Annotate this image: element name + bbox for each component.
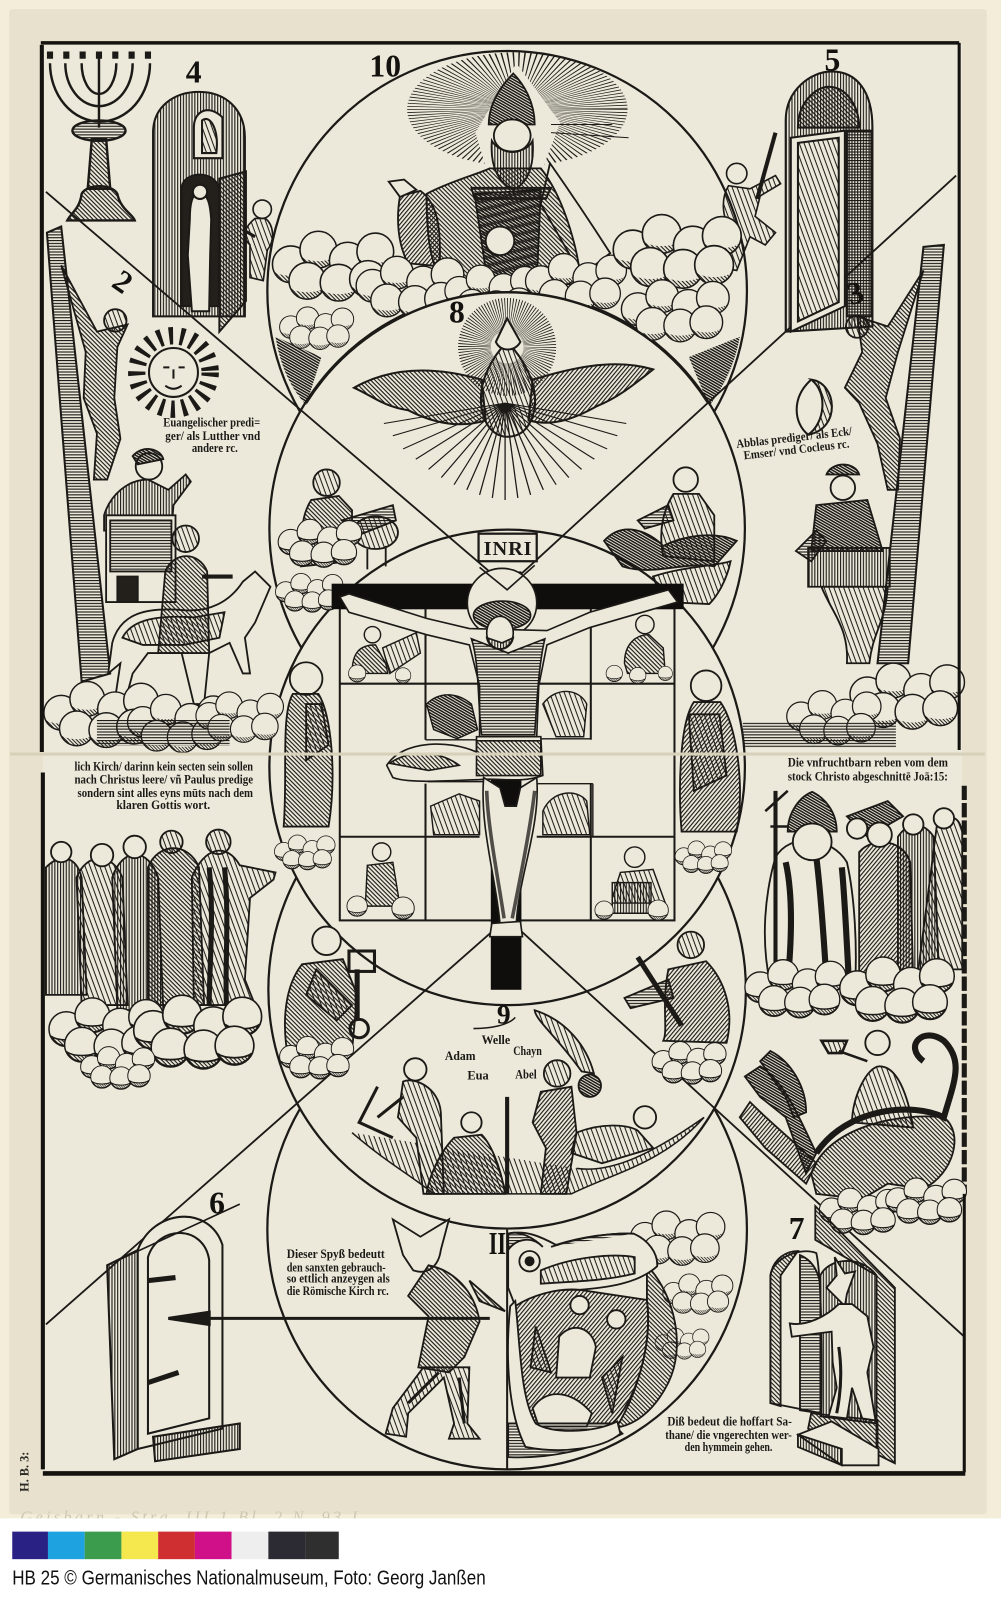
text: hell caption: den hymmein gehen. (685, 1440, 772, 1454)
stamp: H. B. 3: (18, 1452, 32, 1492)
right border segment (962, 786, 967, 1194)
panel: circle 11 devil and hell mouth (107, 1185, 895, 1469)
rays lower (384, 403, 626, 500)
text: left crowd caption: nach Christus leere/ vñ Paulus predige (74, 773, 254, 787)
icon: Mary (274, 662, 335, 870)
icon: horseman (108, 526, 270, 704)
icon: Moses (595, 847, 668, 920)
icon: God the Father (389, 73, 610, 290)
text: spear caption: die Römische Kirch rc. (287, 1284, 389, 1298)
text: hell caption (665, 1414, 792, 1454)
panel: right crowd (745, 791, 962, 1023)
icon: sun (137, 336, 210, 409)
panel: left crowd (46, 830, 276, 1089)
number 11: II (489, 1226, 506, 1261)
icon: Eve (427, 1112, 505, 1194)
text: spear caption: so ettlich anzeygen als (287, 1272, 390, 1286)
icon: arched door (786, 71, 872, 332)
text: left crowd caption: sondern sint alles eyns mūts nach dem (78, 786, 253, 800)
icon: angel left (243, 200, 273, 281)
icon: arch doorway with figure (153, 92, 246, 332)
icon: John (675, 670, 740, 873)
text: Evangelical preacher caption: Euangelischer predi= (163, 416, 260, 430)
icon: evangelist top left (349, 627, 420, 683)
text: spear caption: den sanxten gebrauch- (287, 1260, 386, 1274)
icon: INRI titulus (479, 534, 537, 561)
icon: ox (431, 794, 480, 835)
text: spear caption (287, 1247, 390, 1298)
text: indulgence preacher caption: Abblas prediger/ als Eck/ (735, 424, 853, 451)
text: left crowd caption (74, 759, 254, 812)
icon: devil with spear (386, 1219, 505, 1439)
text: left crowd caption: klaren Gottis wort. (116, 798, 210, 812)
labels: Abel (515, 1068, 537, 1082)
icon: Christ crucified (340, 565, 678, 937)
icon: door left (107, 1204, 240, 1461)
panel: circle 8 dove (276, 294, 737, 612)
number 7: 7 (789, 1211, 805, 1246)
panel: central crucifixion (274, 534, 740, 990)
labels: Adam (445, 1049, 476, 1063)
text: Evangelical preacher caption (163, 416, 260, 455)
number 4: 4 (186, 55, 202, 90)
icon: menorah (47, 55, 153, 220)
labels: Chayn (513, 1044, 542, 1058)
icon: Abel's altar and club (505, 1097, 509, 1194)
number 10: 10 (369, 49, 401, 84)
icon: INRI titulus: INRI (484, 538, 532, 560)
icon: moon (797, 380, 832, 435)
footer band (0, 1518, 1001, 1600)
text: right crowd caption (788, 755, 948, 784)
labels (445, 1033, 542, 1083)
icon: preacher in pulpit (104, 449, 191, 602)
grid of squares (340, 608, 674, 920)
clouds right (743, 663, 964, 748)
panel: Paul with sword (624, 932, 729, 1084)
icon: right preacher and pulpit (796, 465, 890, 663)
clouds beside hell mouth (631, 1211, 733, 1359)
text: hell caption: Diß bedeut die hoffart Sa- (667, 1414, 792, 1428)
icon: Adam hoeing (359, 1058, 444, 1194)
clouds left (44, 682, 283, 753)
number 8: 8 (449, 294, 465, 329)
number 6: 6 (209, 1185, 225, 1220)
icon: spear (168, 1312, 490, 1324)
text: right crowd caption: stock Christo abgeschnittē Joā:15: (788, 770, 948, 784)
circle 8 edge repaint (306, 292, 708, 403)
rays (450, 74, 585, 144)
icon: cross beam right (878, 245, 944, 663)
vertical divider (506, 1230, 508, 1469)
panel: circle 9 Adam and Eve (352, 998, 704, 1194)
fold line (10, 753, 985, 756)
labels: Eua (467, 1069, 489, 1083)
clouds below crowd (49, 995, 262, 1089)
text: Evangelical preacher caption: andere rc. (192, 441, 238, 455)
icon: hell mouth (508, 1232, 677, 1457)
panel: Peter with key (280, 927, 374, 1079)
credit line: HB 25 © Germanisches Nationalmuseum, Foto: Georg Janßen (12, 1568, 486, 1590)
long ray (551, 125, 629, 138)
icon: Cain (533, 1010, 601, 1194)
icon: dove (354, 318, 653, 437)
text: Evangelical preacher caption: ger/ als Lutther vnd (165, 429, 260, 443)
clouds below pope (745, 957, 954, 1023)
icon: cross beam left (47, 227, 110, 682)
flourish (473, 1017, 515, 1029)
number 2: 2 (106, 263, 139, 301)
text: spear caption: Dieser Spyß bedeutt (287, 1247, 386, 1261)
small scenes in squares (347, 615, 672, 920)
text: left crowd caption: lich Kirch/ darinn kein secten sein sollen (74, 759, 253, 773)
rays top (474, 314, 540, 380)
icon: evangelist top right (606, 615, 672, 684)
ground (352, 1117, 704, 1194)
clouds top (272, 215, 741, 349)
panel: whore of Babylon on the beast (740, 1031, 967, 1235)
icon: kneeling man (604, 467, 737, 604)
icon: angel symbol (543, 691, 587, 737)
icon: door with devil right (770, 1206, 895, 1465)
panel: candelabrum and door 4 (47, 55, 273, 332)
icon: crucified thief left (61, 265, 128, 480)
icon: lion (543, 793, 590, 835)
number 9: 9 (497, 998, 511, 1029)
number 3: 3 (843, 274, 868, 312)
panel: right crucifix and preacher (735, 245, 964, 748)
text: right crowd caption: Die vnfruchtbarn reben vom dem (788, 755, 948, 769)
icon: angel with sword (719, 133, 781, 270)
text: indulgence preacher caption (735, 424, 855, 463)
hatched corners (276, 337, 321, 405)
white halo around tiara (476, 63, 560, 173)
text: indulgence preacher caption: Emser/ vnd Cocleus rc. (743, 436, 850, 462)
panel: left crucifix and preachers (44, 227, 283, 753)
icon: Abel (571, 1106, 656, 1163)
icon: black cross (332, 571, 684, 990)
icon: crucified thief right (845, 270, 923, 490)
icon: eagle (427, 695, 478, 739)
icon: shepherd with lamb (276, 469, 398, 612)
clouds under beast (819, 1178, 967, 1235)
panel: circle 10 God the Father (272, 49, 741, 406)
number 5: 5 (824, 42, 840, 77)
labels: Welle (482, 1033, 511, 1047)
text: hell caption: thane/ die vngerechten wer- (665, 1428, 792, 1442)
handwritten inscription: Geisbarn - Stra. III 1 Bl. 2 N. 93 I (20, 1507, 359, 1526)
colour calibration strip (12, 1532, 339, 1559)
icon: seated man bottom left (347, 843, 414, 919)
panel: door 5 (719, 42, 872, 332)
